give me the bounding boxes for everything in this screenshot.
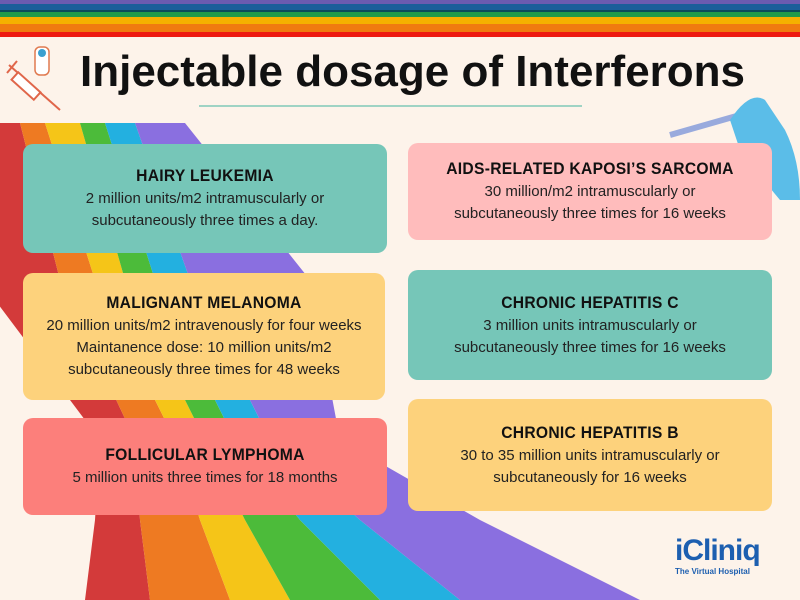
heading: kaposi's sarcoma: AIDS-RELATED KAPOSI’S SARCOMA bbox=[446, 159, 734, 178]
text: kaposi dosage bbox=[454, 183, 726, 222]
text: hairy leukemia dosage: 2 million units/m2 intramuscularly or bbox=[86, 190, 324, 207]
text: melanoma dosage: Maintanence dose: 10 million units/m2 bbox=[76, 339, 332, 356]
text: hairy leukemia dosage bbox=[86, 190, 324, 229]
title: Injectable dosage of Interferons bbox=[80, 47, 745, 96]
divider line under title bbox=[199, 105, 582, 107]
text: hairy leukemia dosage: subcutaneously three times a day. bbox=[92, 212, 318, 229]
heading: malignant melanoma: MALIGNANT MELANOMA bbox=[106, 293, 302, 312]
heading: follicular lymphoma: FOLLICULAR LYMPHOMA bbox=[105, 445, 305, 464]
text: melanoma dosage: 20 million units/m2 intravenously for four weeks bbox=[46, 317, 362, 334]
text: hepatitis c dosage: 3 million units intramuscularly or bbox=[483, 316, 697, 334]
panel: kaposi's sarcoma bbox=[408, 143, 772, 240]
panel: chronic hepatitis c bbox=[408, 270, 772, 380]
heading: hepatitis b: CHRONIC HEPATITIS B bbox=[501, 422, 679, 442]
top rainbow stripes bbox=[0, 0, 800, 37]
panel: chronic hepatitis b bbox=[408, 399, 772, 511]
panel: malignant melanoma bbox=[23, 273, 385, 400]
heading: hepatitis c: CHRONIC HEPATITIS C bbox=[501, 292, 679, 312]
logo: iCliniq: iCliniq bbox=[675, 534, 760, 567]
text: kaposi dosage: 30 million/m2 intramuscularly or bbox=[485, 183, 695, 200]
panel: hairy leukemia bbox=[23, 144, 387, 253]
heading: hairy leukemia: HAIRY LEUKEMIA bbox=[136, 166, 274, 185]
panel: follicular lymphoma bbox=[23, 418, 387, 515]
logo: iCliniq: The Virtual Hospital bbox=[675, 567, 750, 576]
text: hepatitis b dosage: subcutaneously for 16 weeks bbox=[493, 468, 687, 486]
text: hepatitis b dosage bbox=[460, 446, 720, 486]
text: lymphoma dosage: 5 million units three times for 18 months bbox=[72, 469, 338, 486]
text: kaposi dosage: subcutaneously three times for 16 weeks bbox=[454, 205, 726, 222]
text: hepatitis b dosage: 30 to 35 million units intramuscularly or bbox=[460, 446, 720, 464]
text: melanoma dosage bbox=[46, 317, 362, 378]
text: hepatitis c dosage: subcutaneously three times for 16 weeks bbox=[454, 338, 726, 356]
text: hepatitis c dosage bbox=[454, 316, 726, 356]
text: melanoma dosage: subcutaneously three times for 48 weeks bbox=[68, 361, 340, 378]
icon: gloved hand with syringe bbox=[669, 98, 800, 200]
icon: syringe and vial bbox=[6, 46, 61, 111]
